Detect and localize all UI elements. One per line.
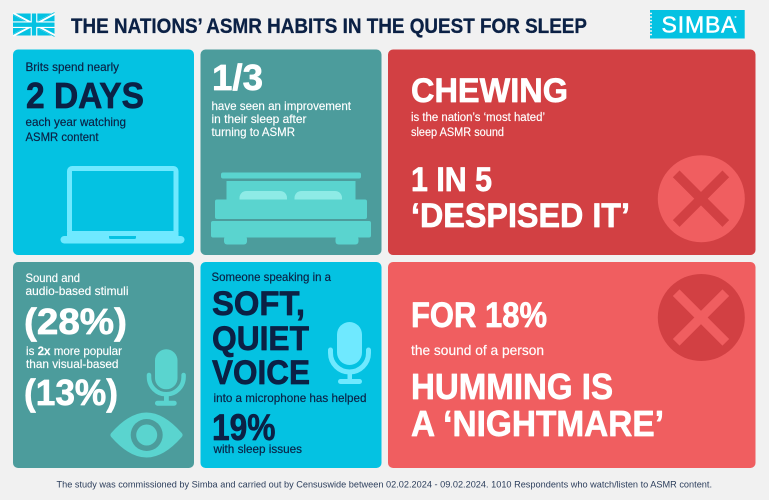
text: improvement description: have seen an improvement [212,99,352,113]
panel: audio vs visual [13,262,194,468]
text: sound and audio-based stimuli: audio-based stimuli [26,284,128,298]
panel: soft quiet voice [200,262,382,468]
logo: Simba: SIMBA [662,12,737,38]
icon: cross circle [658,155,745,242]
text: improvement description: in their sleep after [212,112,306,126]
heading: humming is a nightmare: HUMMING IS [411,366,613,407]
icon: microphone [330,322,368,384]
panel: humming [388,262,756,468]
stat: 2 days: 2 DAYS [26,75,144,116]
text: each year watching ASMR content: each year watching [26,115,126,129]
stat: 1 in 5 despised it: 1 IN 5 [411,161,492,199]
text: 2x more popular: than visual-based [26,357,118,371]
heading: humming is a nightmare: A ‘NIGHTMARE’ [411,403,664,444]
text: sound and audio-based stimuli: Sound and [26,271,80,285]
stat: 1/3: 1/3 [212,57,263,98]
icon: microphone [149,349,184,406]
text: 2x more popular [26,344,122,371]
text: someone speaking: Someone speaking in a [212,270,331,284]
text: sound and audio-based stimuli [26,271,128,298]
icon: bed [211,172,371,244]
text: improvement description [212,99,352,139]
icon: laptop [60,168,184,244]
heading: chewing: CHEWING [411,72,568,110]
heading: humming is a nightmare [411,366,664,444]
heading: soft quiet voice: VOICE [212,354,310,392]
text: 2x more popular: is 2x more popular [26,344,122,358]
text: the sound of a person: the sound of a person [411,342,544,358]
text: Brits spend nearly: Brits spend nearly [26,60,119,74]
text: with sleep issues: with sleep issues [213,442,302,456]
panel: one third improvement [200,50,382,255]
text: into a microphone: into a microphone has helped [214,391,366,405]
stat: 13%: (13%) [24,372,118,413]
text: most hated sound: sleep ASMR sound [411,127,504,139]
stat: 28%: (28%) [24,301,127,342]
heading: soft quiet voice [212,285,310,392]
text: most hated sound [411,112,545,139]
stat: for 18%: FOR 18% [411,295,547,335]
heading: soft quiet voice: QUIET [212,320,309,358]
stat: 1 in 5 despised it [411,161,630,235]
footnote: The study was commissioned by Simba and carried out by Censuswide between 02.02.2024 - 09.02.2024. 1010 Respondents who watch/listen to ASMR content. [56,480,712,491]
panel: chewing [388,50,756,255]
text: each year watching ASMR content [26,115,126,144]
icon: cross circle [658,274,745,361]
text: most hated sound: is the nation’s ‘most hated’ [411,112,545,124]
heading: soft quiet voice: SOFT, [212,285,305,323]
stat: 1 in 5 despised it: ‘DESPISED IT’ [411,197,630,235]
title: THE NATIONS’ ASMR HABITS IN THE QUEST FOR SLEEP [71,15,587,38]
stat: 19%: 19% [212,406,276,448]
text: improvement description: turning to ASMR [212,125,295,139]
icon: UK flag [13,12,54,36]
panel: 2 days watching [13,50,194,255]
text: each year watching ASMR content: ASMR content [26,130,99,144]
icon: eye [114,416,180,454]
